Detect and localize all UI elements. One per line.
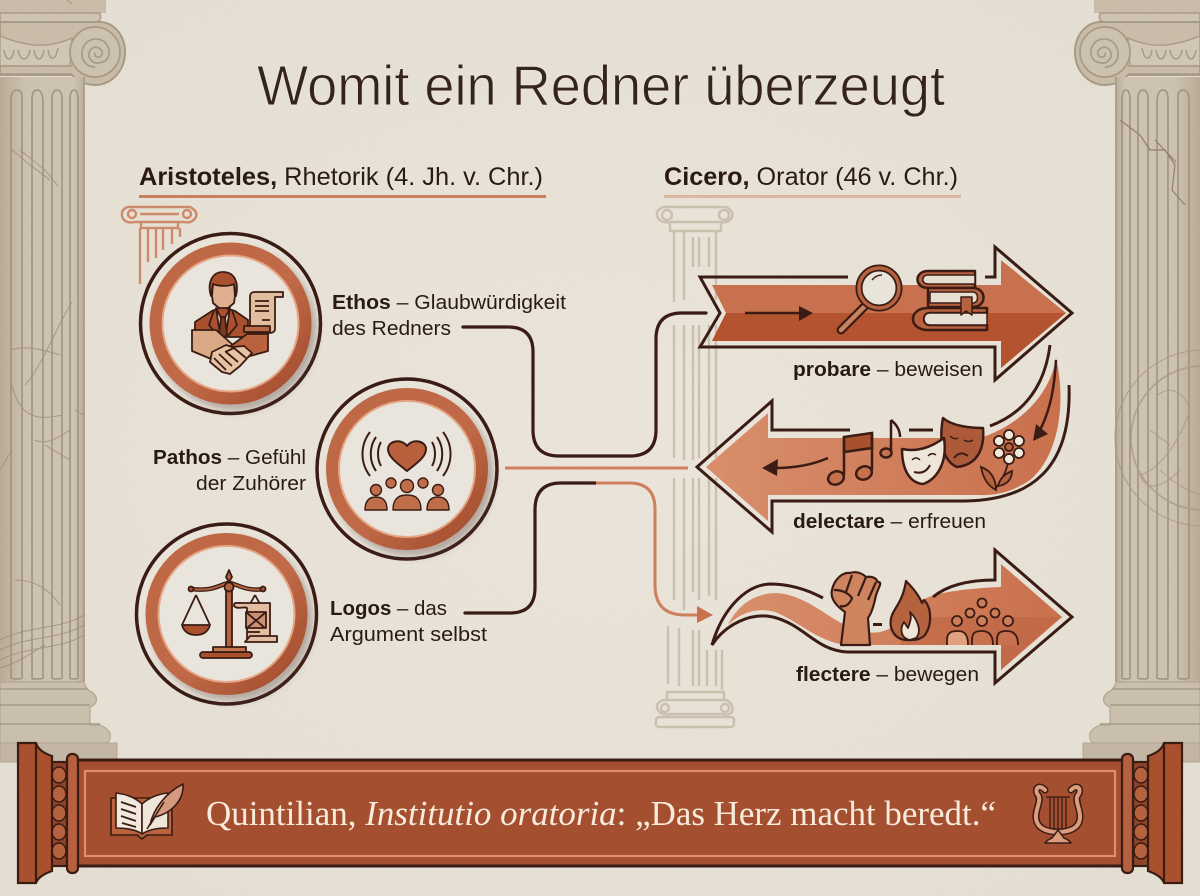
icon: crowd xyxy=(947,598,1018,645)
icon: heart and audience xyxy=(362,432,450,510)
Logos medallion xyxy=(136,524,316,704)
banner left end cap xyxy=(18,743,78,883)
quote: Quintilian, Institutio oratoria: „Das Herz macht beredt.“ xyxy=(206,794,996,833)
Ethos label line 2: des Redners xyxy=(332,318,451,340)
icon: small arrow xyxy=(745,306,813,321)
arrow: flectere xyxy=(712,550,1072,686)
icon: flower xyxy=(981,430,1024,490)
icon: dash xyxy=(873,623,882,626)
icon: flame xyxy=(891,581,930,640)
heading: Aristoteles: Aristoteles, Rhetorik (4. Jh. v. Chr.) xyxy=(139,163,543,191)
arrow: delectare xyxy=(697,345,1069,533)
left column xyxy=(0,0,125,762)
delectare label: delectare – erfreuen xyxy=(793,511,986,533)
icon: small arrow right xyxy=(1033,360,1056,441)
Ethos medallion xyxy=(140,234,320,414)
flectere label: flectere – bewegen xyxy=(796,664,979,686)
arrow: probare xyxy=(700,247,1072,381)
Logos label line 2: Argument selbst xyxy=(330,624,487,646)
icon: lyre xyxy=(1036,787,1080,843)
connector: Logos dark part xyxy=(465,483,596,613)
Logos label: Logos – das xyxy=(330,598,447,620)
Pathos medallion xyxy=(317,379,497,559)
icon: theatre masks xyxy=(902,418,983,484)
title: Womit ein Redner überzeugt xyxy=(257,54,945,118)
icon: magnifier xyxy=(841,268,899,330)
icon: scales and document xyxy=(182,570,277,658)
icon: books xyxy=(913,271,987,330)
right column xyxy=(1075,0,1200,762)
banner right end cap xyxy=(1122,743,1182,883)
small orange capital xyxy=(122,207,196,284)
icon: small arrow left xyxy=(762,458,828,476)
icon: speaker, scroll and handshake xyxy=(192,272,283,374)
icon: music notes xyxy=(826,420,900,487)
heading: Cicero: Cicero, Orator (46 v. Chr.) xyxy=(664,163,958,191)
probare label: probare – beweisen xyxy=(793,359,983,381)
Ethos label: Ethos – Glaubwürdigkeit xyxy=(332,292,566,314)
icon: fist xyxy=(832,572,880,645)
connector: Ethos to probare xyxy=(463,313,706,456)
Pathos label line 2: der Zuhörer xyxy=(196,473,306,495)
connector: Logos to flectere xyxy=(596,483,713,623)
banner xyxy=(18,743,1182,883)
Pathos label: Pathos – Gefühl xyxy=(153,447,306,469)
icon: open book with quill xyxy=(111,784,183,839)
center decorative column xyxy=(656,207,734,727)
connector: Pathos to delectare xyxy=(505,466,688,470)
